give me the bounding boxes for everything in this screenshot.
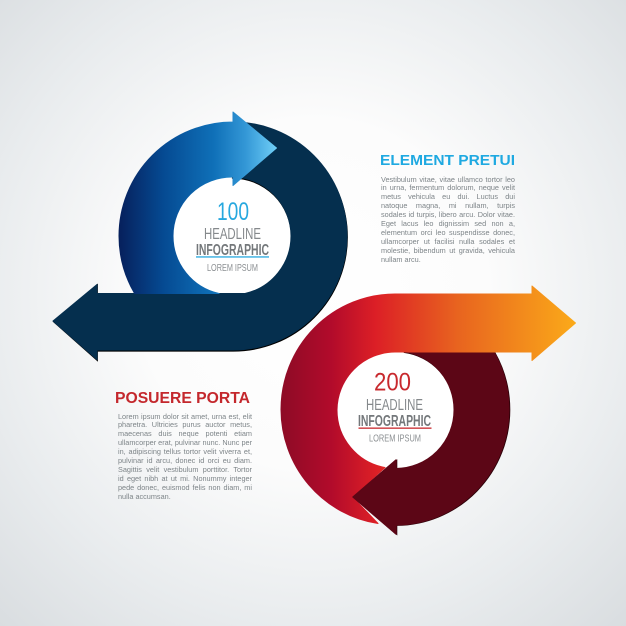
- text block: element pretui: sodales id turpis, libero arcu. Dolor vitae.: [381, 210, 515, 219]
- text block: posuere porta: Sagittis velit vestibulum porttitor. Tortor: [118, 465, 252, 474]
- text block: posuere porta: id eget nibh at ut mi. Nonummy integer: [118, 474, 252, 483]
- blue loop: center circle: [173, 177, 291, 295]
- underline: [196, 256, 269, 258]
- infographic word: INFOGRAPHIC: [358, 413, 431, 430]
- text block: posuere porta: pharetra. Ultricies purus auctor metus,: [118, 420, 252, 429]
- lorem ipsum: LOREM IPSUM: [207, 262, 258, 274]
- text block: posuere porta: pede donec, euismod felis non diam, mi: [118, 483, 252, 492]
- text block: element pretui: nullam arcu.: [381, 255, 421, 264]
- headline: HEADLINE: [204, 226, 261, 243]
- infographic word: INFOGRAPHIC: [196, 242, 269, 259]
- lorem ipsum: LOREM IPSUM: [369, 432, 421, 444]
- text block: posuere porta: maecenas duis neque potenti etiam: [118, 429, 252, 438]
- heading: element pretui: ELEMENT PRETUI: [380, 152, 515, 169]
- value 100: 100: [217, 198, 249, 226]
- text block: posuere porta: [118, 412, 252, 501]
- text block: posuere porta: pulvinar id arcu, donec id orci eu diam.: [118, 456, 252, 465]
- text block: posuere porta: ullamcorper erat, pulvinar nunc. Nunc per: [118, 438, 252, 447]
- text block: posuere porta: in, adipiscing tellus tortor velit viverra et,: [118, 447, 252, 456]
- text block: element pretui: metus vehicula eu dui. Luctus dui: [381, 192, 515, 201]
- label: 200: [358, 368, 432, 444]
- blue loop: dark arrow pointing left: [53, 122, 347, 361]
- label: 100: [196, 198, 269, 274]
- text block: posuere porta: nulla accumsan.: [118, 492, 171, 501]
- red loop: arrowhead overlap: [353, 460, 396, 534]
- text block: posuere porta: Lorem ipsum dolor sit amet, urna est, elit: [118, 412, 252, 420]
- heading: posuere porta: POSUERE PORTA: [115, 390, 250, 407]
- text block: element pretui: natoque magna, mi nullam, turpis: [381, 201, 515, 210]
- text block: element pretui: ullamcorper ut facilisi nulla sodales et: [381, 237, 515, 246]
- text block: element pretui: in urna, fermentum dolorum, neque velit: [381, 183, 515, 192]
- text block: element pretui: Vestibulum vitae, vitae ullamco tortor leo: [381, 174, 515, 184]
- value 200: 200: [374, 368, 411, 396]
- text block: element pretui: molestie, bibendum ut gravida, vehicula: [381, 246, 515, 255]
- text block: element pretui: [381, 174, 515, 264]
- headline: HEADLINE: [366, 397, 423, 414]
- text block: element pretui: Eget lacus leo dignissim sed non a,: [381, 219, 515, 228]
- blue loop: gradient arrow pointing right: [119, 112, 276, 294]
- underline: [358, 428, 432, 429]
- red loop: center circle: [337, 352, 454, 468]
- text block: element pretui: elementum orci leo suspendisse donec,: [381, 228, 515, 237]
- red loop: gradient arrow pointing right: [281, 286, 576, 524]
- red loop: dark arrow pointing left: [353, 352, 510, 534]
